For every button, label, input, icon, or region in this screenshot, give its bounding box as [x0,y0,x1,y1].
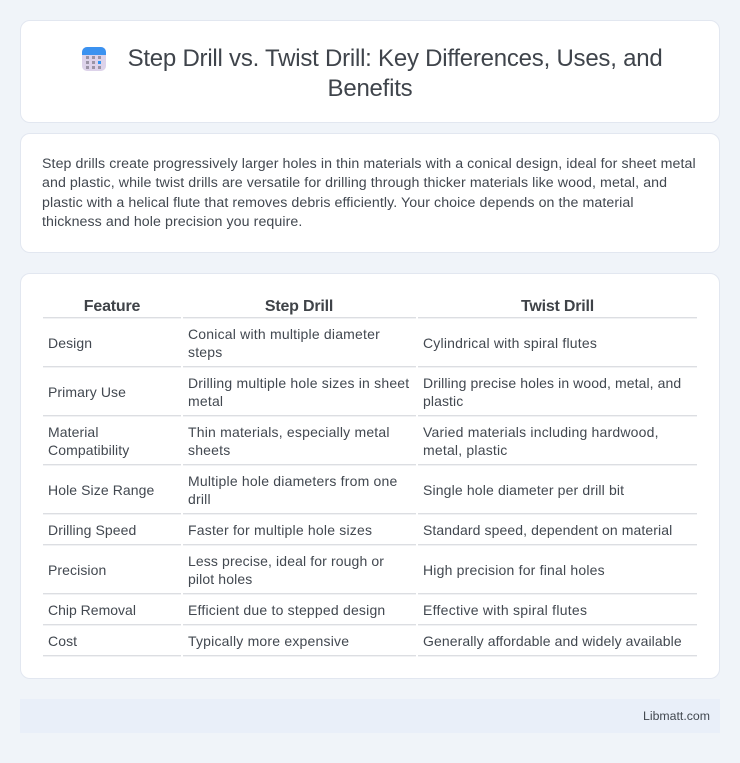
row: Hole Size Range: drill [188,491,211,507]
row: Design: Design [48,335,92,351]
row: Hole Size Range: Single hole diameter per drill bit [423,482,624,498]
table header: Step Drill [265,298,333,315]
title [128,45,662,102]
row: Chip Removal: Efficient due to stepped design [188,602,385,618]
intro text [42,156,696,230]
row: Hole Size Range [43,473,697,515]
row: Material Compatibility: Thin materials, especially metal [188,424,390,440]
header panel [20,20,720,123]
row: Precision: High precision for final holes [423,562,605,578]
intro text: and plastic, while twist drills are versatile for drilling through thicker materials like wood, metal, and [42,175,667,191]
row: Primary Use: Primary Use [48,384,126,400]
row: Hole Size Range: Hole Size Range [48,482,154,498]
row: Precision: pilot holes [188,571,252,587]
table header: Twist Drill [521,298,594,315]
row: Cost: Cost [48,633,77,649]
intro text: plastic with a helical flute that removes debris efficiently. Your choice depends on the material [42,195,634,211]
row: Primary Use: plastic [423,393,463,409]
intro text: thickness and hole precision you require. [42,214,302,230]
title: Benefits [328,75,412,102]
comparison table panel [20,273,720,679]
footer text: Libmatt.com [643,709,710,723]
row: Precision [43,553,697,595]
row: Design [43,326,697,368]
row: Cost [43,633,697,657]
row: Primary Use: metal [188,393,223,409]
row: Material Compatibility: metal, plastic [423,442,508,458]
row: Primary Use: Drilling precise holes in wood, metal, and [423,375,681,391]
row: Material Compatibility: Varied materials including hardwood, [423,424,659,440]
row: Material Compatibility: sheets [188,442,230,458]
row: Drilling Speed: Standard speed, dependent on material [423,522,672,538]
row: Design: steps [188,344,222,360]
intro panel [20,133,720,253]
row: Chip Removal: Chip Removal [48,602,136,618]
intro text: Step drills create progressively larger holes in thin materials with a conical design, ideal for sheet metal [42,156,696,172]
row: Precision: Less precise, ideal for rough or [188,553,384,569]
row: Material Compatibility: Material [48,424,99,440]
row: Drilling Speed: Faster for multiple hole sizes [188,522,372,538]
table header: Feature [84,298,140,315]
icon: calendar [82,47,106,71]
footer bar [20,699,720,733]
row: Primary Use: Drilling multiple hole sizes in sheet [188,375,409,391]
title: Step Drill vs. Twist Drill: Key Differences, Uses, and [128,45,662,72]
row: Cost: Typically more expensive [188,633,349,649]
row: Primary Use [43,375,697,417]
row: Precision: Precision [48,562,106,578]
row: Material Compatibility [43,424,697,466]
row: Chip Removal: Effective with spiral flutes [423,602,587,618]
row: Hole Size Range: Multiple hole diameters from one [188,473,398,489]
row: Design: Cylindrical with spiral flutes [423,335,597,351]
row: Drilling Speed [43,522,697,546]
row: Drilling Speed: Drilling Speed [48,522,136,538]
row: Material Compatibility: Compatibility [48,442,129,458]
row: Chip Removal [43,602,697,626]
row: Design: Conical with multiple diameter [188,326,380,342]
table header [43,298,697,319]
row: Cost: Generally affordable and widely available [423,633,682,649]
